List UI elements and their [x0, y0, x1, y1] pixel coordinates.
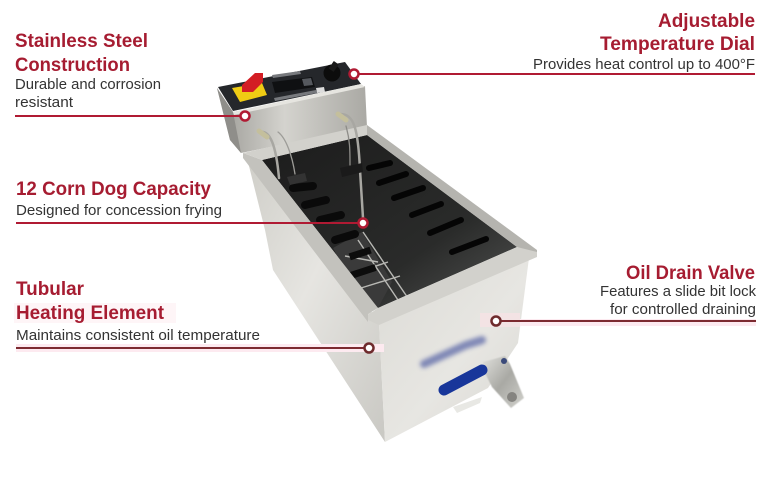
heading: Tubular [16, 279, 85, 300]
left wall slots [293, 186, 355, 240]
description: Provides heat control up to 400°F [533, 57, 755, 73]
valve blue handle [444, 370, 482, 390]
callout: tubular heating element [14, 279, 384, 352]
description: Durable and corrosion [15, 77, 161, 93]
leader line [15, 115, 245, 117]
valve shadow [453, 397, 482, 413]
heading highlight [14, 303, 176, 323]
line halo [520, 319, 756, 326]
callout: stainless steel construction: Construction [15, 55, 130, 76]
basket area [333, 232, 392, 308]
description: Maintains consistent oil temperature [16, 328, 260, 344]
valve body [483, 356, 524, 408]
tank rim [243, 125, 537, 325]
leader line [16, 347, 369, 349]
leader line [354, 73, 755, 75]
basket wires [345, 232, 412, 304]
basket handles [259, 114, 363, 218]
heading: Stainless Steel [15, 31, 148, 52]
heading: 12 Corn Dog Capacity [16, 179, 211, 200]
marker dot [358, 218, 368, 228]
description: Features a slide bit lock [600, 284, 757, 300]
callout: adjustable temperature dial: Temperature Dial [600, 34, 755, 55]
callout: oil drain valve [480, 263, 757, 327]
callout: 12 corn dog capacity [16, 179, 368, 228]
fryer illustration [217, 61, 537, 442]
description: Designed for concession frying [16, 203, 222, 219]
marker dot [350, 70, 358, 78]
icon: power switch [232, 73, 267, 102]
control box [217, 61, 367, 153]
callout: stainless steel construction: resistant [15, 95, 73, 111]
tank interior [262, 135, 517, 308]
tank body left face [247, 158, 385, 442]
right wall slots [369, 163, 486, 252]
heading: Oil Drain Valve [626, 263, 755, 284]
display panel [272, 71, 325, 101]
icon: temperature dial [324, 61, 340, 82]
marker halo [480, 313, 520, 327]
valve handle reflection [424, 340, 482, 364]
leader line [16, 222, 363, 224]
callout: stainless steel construction [15, 31, 250, 120]
callout: tubular heating element: Heating Element [16, 303, 165, 324]
drain valve [424, 340, 524, 413]
callout: adjustable temperature dial [350, 11, 755, 78]
tank body front face [379, 258, 529, 442]
leader line [496, 320, 756, 322]
line halo [16, 344, 384, 352]
marker dot [492, 316, 500, 326]
heading: Adjustable [658, 11, 755, 32]
marker dot [364, 344, 374, 352]
callout: oil drain valve: for controlled draining [610, 302, 756, 318]
marker dot [240, 112, 250, 120]
